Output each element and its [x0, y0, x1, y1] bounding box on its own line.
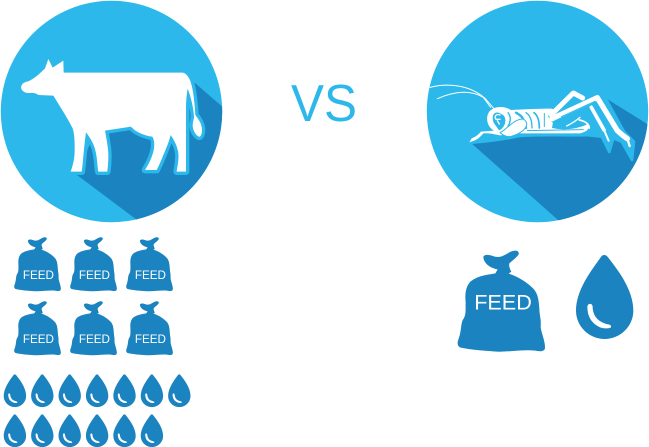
cricket long shadow — [470, 100, 648, 220]
water drop: cricket — [576, 255, 633, 339]
heading: VS: VS — [291, 75, 357, 133]
bag labels: FEED — [23, 269, 54, 282]
panel: cricket circle — [427, 1, 649, 240]
bag 3 — [126, 237, 173, 291]
feed bag: cricket: FEED — [474, 290, 532, 314]
bag 6 — [126, 301, 173, 355]
feed bag: cricket — [458, 251, 545, 352]
bag 2 — [70, 237, 117, 291]
bag labels — [23, 269, 166, 346]
cricket body details — [493, 113, 583, 131]
bag labels: FEED — [79, 269, 110, 282]
bag labels: FEED — [135, 269, 166, 282]
bag 5 — [70, 301, 117, 355]
cricket halo — [472, 95, 634, 160]
panel: cow circle — [0, 0, 222, 222]
cricket antennae — [430, 85, 494, 109]
feed bags: cow (six bags) — [14, 237, 173, 355]
water drops: cow (thirteen drops) — [4, 374, 191, 447]
bag labels: FEED — [79, 333, 110, 346]
cow long shadow — [77, 83, 222, 220]
cricket hind legs — [552, 93, 630, 146]
bag labels: FEED — [23, 333, 54, 346]
cricket foreleg thigh — [501, 120, 526, 136]
bag 4 — [14, 301, 61, 355]
icon: cricket — [430, 85, 634, 160]
icon: cow — [21, 59, 202, 172]
cricket body — [469, 107, 589, 142]
bag labels: FEED — [135, 333, 166, 346]
bag 1 — [14, 237, 61, 291]
